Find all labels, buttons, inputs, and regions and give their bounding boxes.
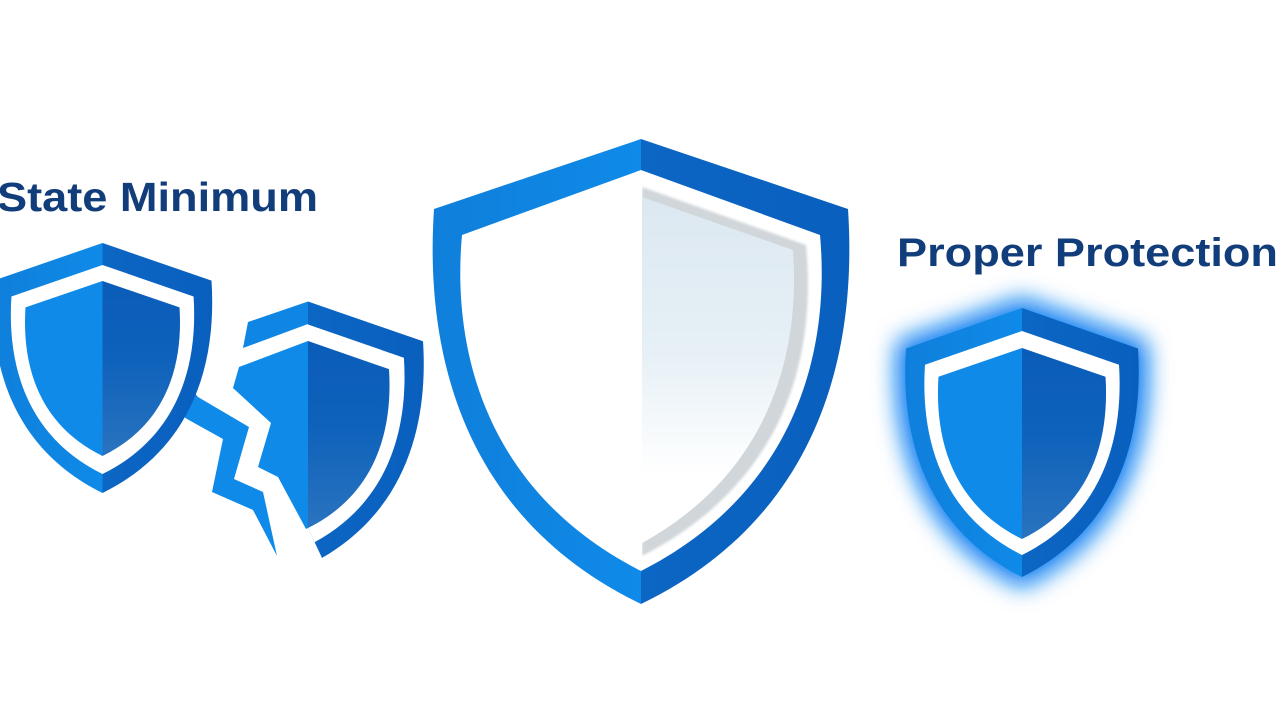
small shield inner left bbox=[25, 281, 102, 456]
small shield inner right bbox=[102, 281, 180, 456]
glowing shield outer right bbox=[1022, 308, 1139, 577]
broken shield inner right bbox=[308, 341, 390, 528]
glowing shield inner left bbox=[938, 348, 1022, 539]
icon: glowing shield bbox=[905, 308, 1139, 577]
icon: jagged crack fragment bbox=[175, 385, 277, 556]
broken shield outer left fragment bbox=[243, 302, 308, 348]
small shield white band bbox=[11, 265, 194, 474]
large shield pale right panel bbox=[642, 197, 794, 543]
heading: Proper Protection: Proper Protection bbox=[897, 231, 1278, 275]
broken shield outer right bbox=[308, 302, 424, 565]
broken shield inner left bbox=[233, 341, 308, 529]
glowing shield white band bbox=[924, 331, 1120, 555]
glowing shield outer left bbox=[905, 308, 1022, 577]
shield glow bbox=[905, 308, 1139, 577]
small shield outer left bbox=[0, 243, 102, 493]
icon: intact small shield bbox=[0, 243, 212, 493]
large shield white face bbox=[460, 170, 822, 571]
large shield grey inner edge bbox=[642, 187, 808, 556]
large shield outer right bbox=[641, 139, 849, 604]
small shield outer right bbox=[102, 243, 212, 493]
icon: large central shield bbox=[433, 139, 849, 604]
icon: broken shield bbox=[233, 302, 424, 565]
large shield outer left bbox=[433, 139, 641, 604]
glowing shield inner right bbox=[1022, 348, 1106, 539]
heading: State Minimum: State Minimum bbox=[0, 174, 318, 220]
